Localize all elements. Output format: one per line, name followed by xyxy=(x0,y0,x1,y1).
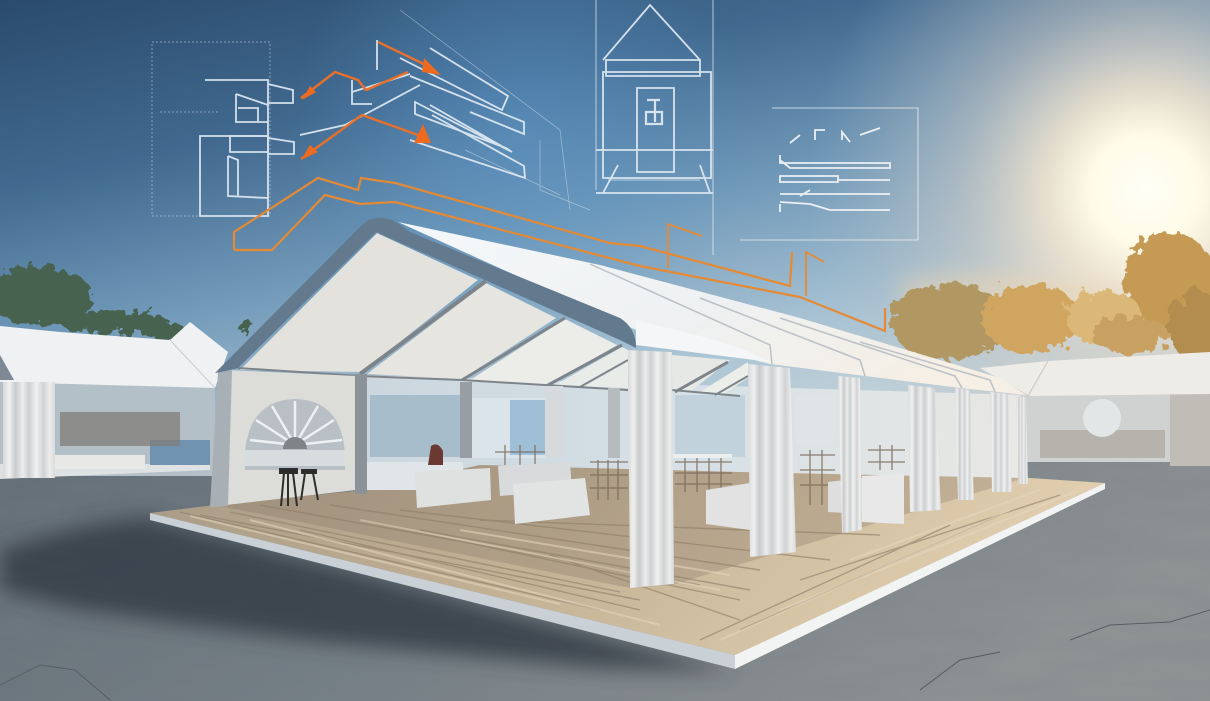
right background tent xyxy=(980,352,1210,466)
gable frame xyxy=(215,218,636,373)
roof xyxy=(215,218,1026,395)
curtains xyxy=(628,350,1028,588)
orange arrows xyxy=(301,42,441,160)
bar stools xyxy=(280,469,318,506)
trees right xyxy=(890,232,1210,361)
tent interior xyxy=(365,375,1020,505)
sky background xyxy=(0,0,1210,480)
frame and rafters xyxy=(238,281,748,396)
blueprint: center section xyxy=(596,0,713,255)
deck edge xyxy=(150,513,735,669)
left background tent xyxy=(0,322,228,479)
white cube seats xyxy=(415,462,904,530)
ground xyxy=(0,462,1210,701)
trees left xyxy=(0,266,253,339)
front gable wall xyxy=(210,370,620,507)
ground cracks xyxy=(0,610,1210,700)
ceiling panels xyxy=(240,233,748,396)
deck xyxy=(150,465,1105,669)
blueprint: right details xyxy=(740,108,918,240)
blueprint: angled panels xyxy=(300,10,590,210)
ground shadow xyxy=(0,518,735,672)
blueprint: left elevation xyxy=(152,42,294,216)
person seated xyxy=(428,444,443,465)
orange routed lines xyxy=(234,178,885,331)
arched window xyxy=(245,399,345,470)
tables and chairs xyxy=(495,445,905,505)
roof canopy xyxy=(398,222,1026,395)
